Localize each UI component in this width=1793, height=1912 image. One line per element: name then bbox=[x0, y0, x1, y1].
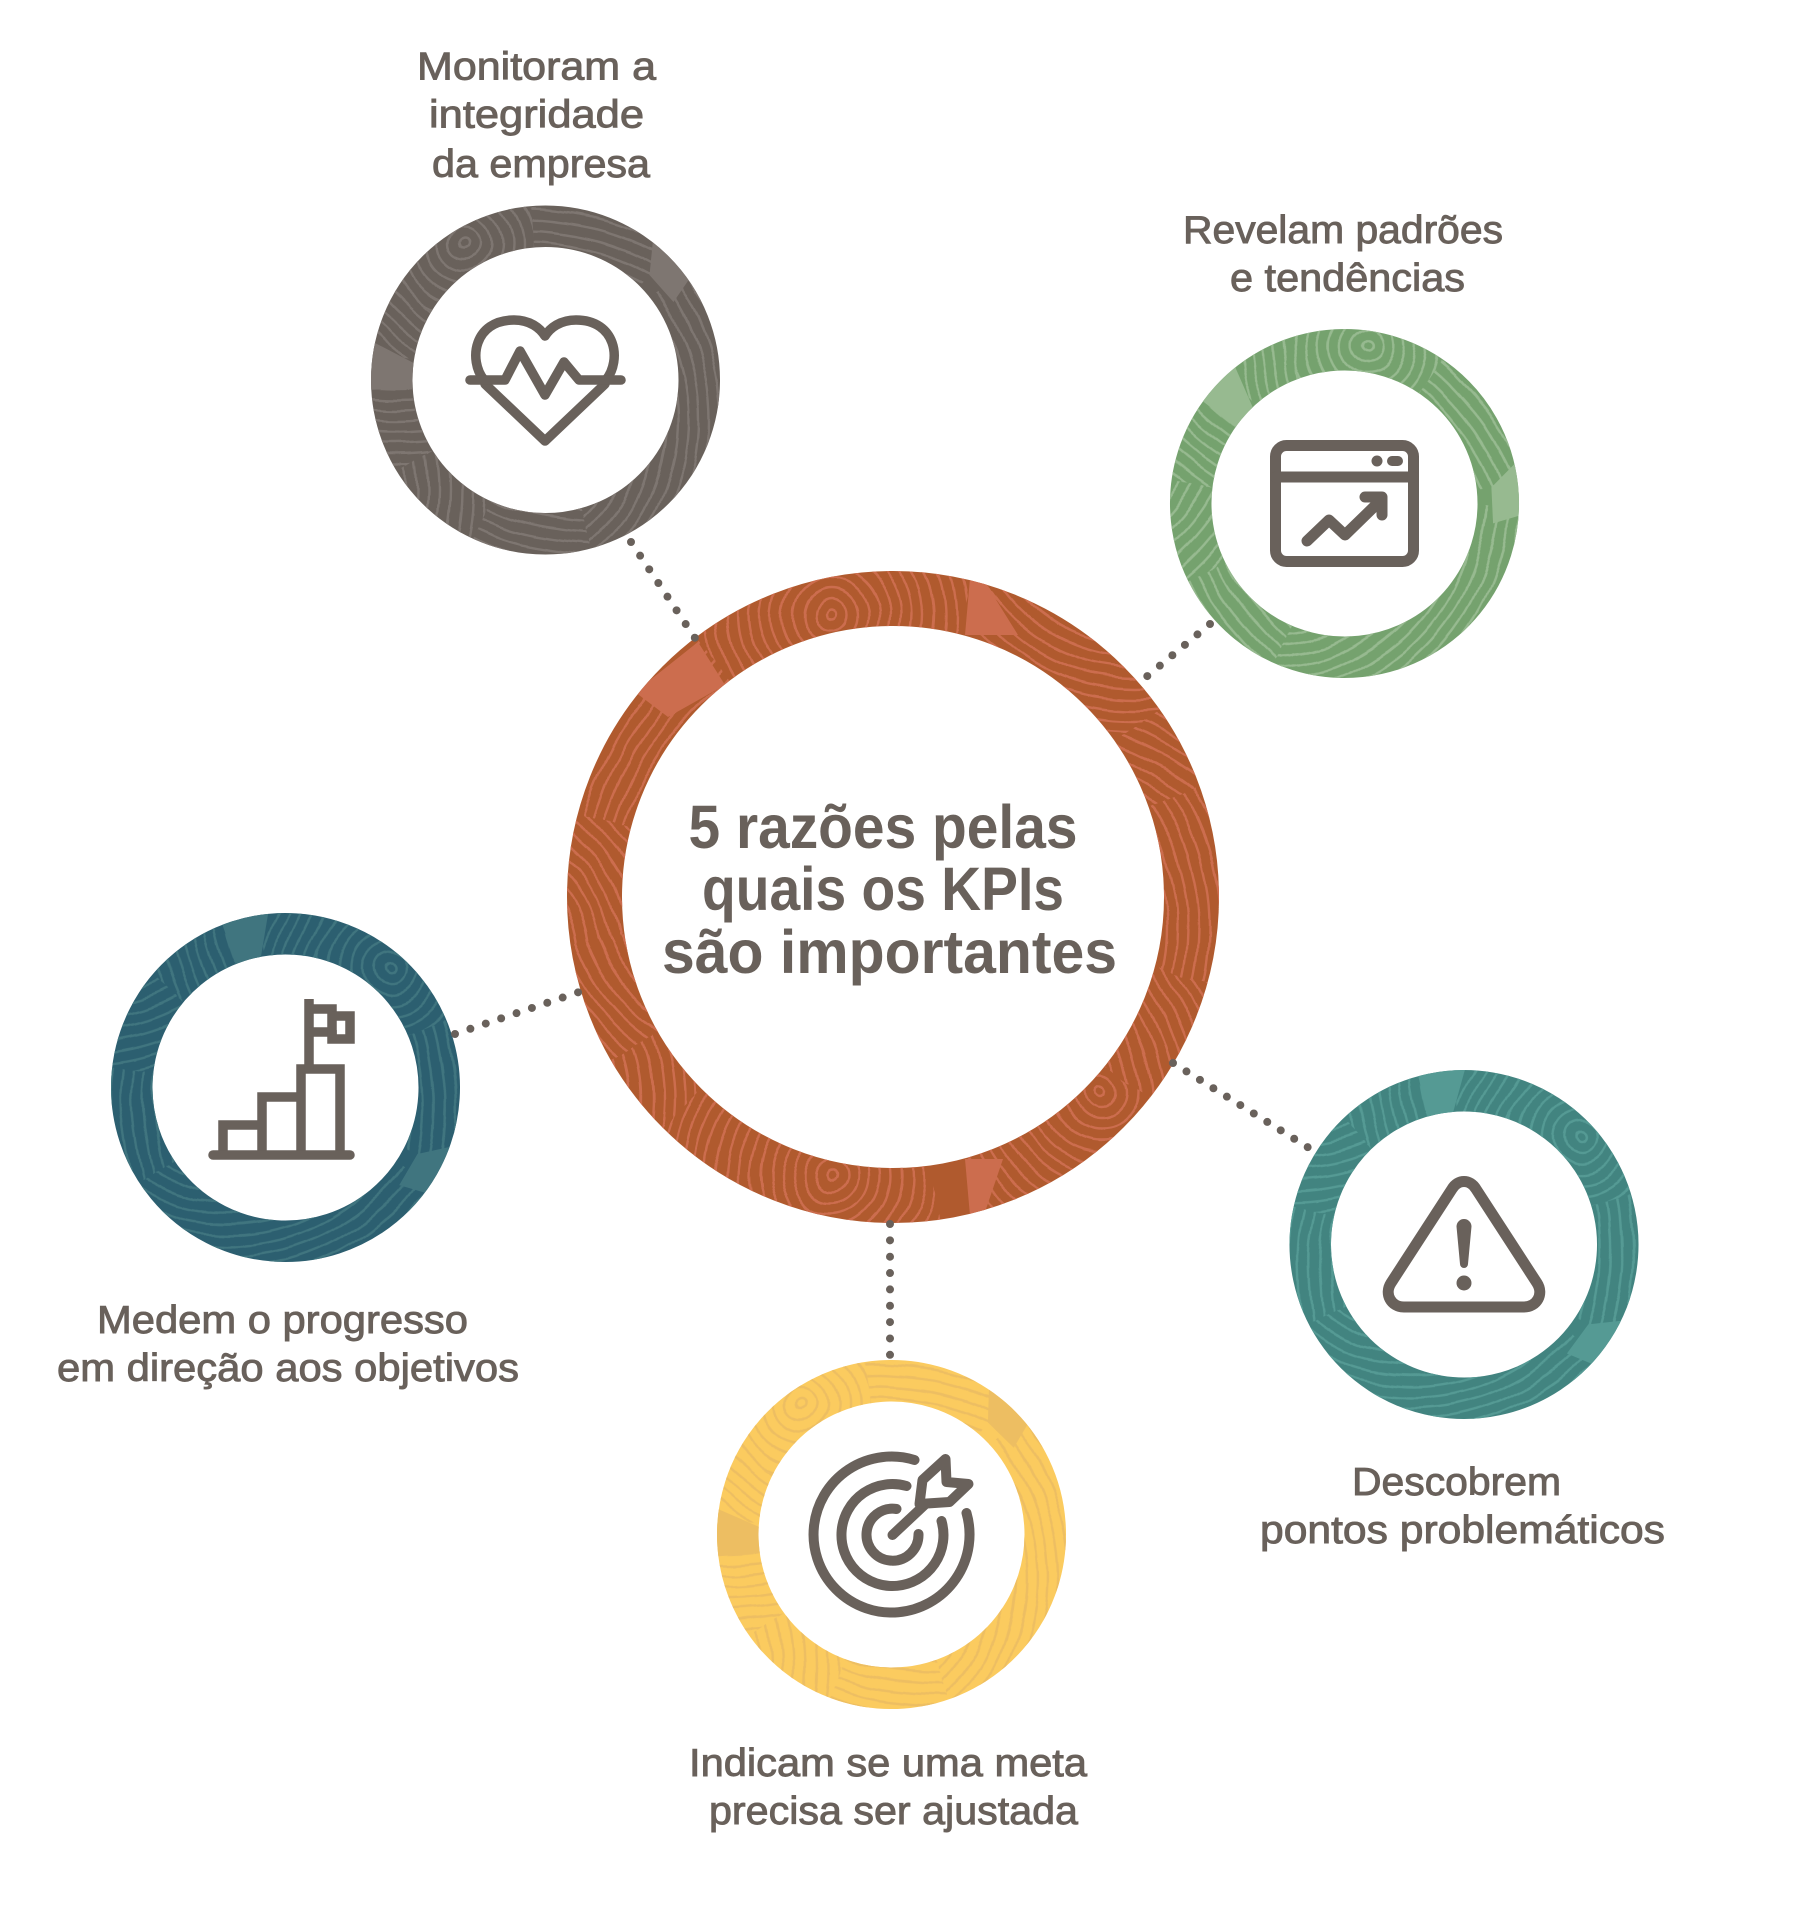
ring: goal bbox=[727, 1370, 1056, 1699]
label: goal: precisa ser ajustada bbox=[709, 1790, 1078, 1833]
title: são importantes bbox=[662, 918, 1117, 986]
dotted connector: health to centre bbox=[631, 542, 695, 638]
label: goal: Indicam se uma meta bbox=[689, 1742, 1087, 1785]
label: problem points bbox=[1260, 1461, 1665, 1552]
label: company health: Monitoram a bbox=[417, 46, 656, 88]
dotted connector: progress to centre bbox=[455, 992, 579, 1034]
label: progress: em direção aos objetivos bbox=[57, 1347, 519, 1390]
label: patterns and trends: e tendências bbox=[1230, 257, 1465, 300]
label: goal bbox=[689, 1742, 1087, 1833]
central ring bbox=[594, 598, 1192, 1196]
label: company health: integridade bbox=[429, 94, 644, 136]
label: company health bbox=[417, 46, 656, 186]
label: progress: Medem o progresso bbox=[97, 1299, 468, 1342]
icon: warning triangle bbox=[1388, 1182, 1540, 1307]
label: patterns and trends: Revelam padrões bbox=[1183, 209, 1503, 252]
label: problem points: pontos problemáticos bbox=[1260, 1509, 1665, 1552]
title bbox=[662, 793, 1117, 986]
dotted connector: problems to centre bbox=[1173, 1063, 1309, 1148]
icon: ascending bars with flag bbox=[213, 999, 350, 1155]
icon: target with arrow bbox=[814, 1457, 970, 1613]
ring: patterns and trends bbox=[1170, 329, 1519, 678]
dotted connector: trends to centre bbox=[1145, 624, 1210, 678]
ring: problem points bbox=[1282, 1062, 1646, 1427]
label: patterns and trends bbox=[1183, 209, 1503, 300]
icon: heart with pulse bbox=[470, 320, 621, 441]
title: quais os KPIs bbox=[702, 855, 1064, 923]
title: 5 razões pelas bbox=[688, 793, 1078, 861]
label: company health: da empresa bbox=[432, 143, 650, 186]
ring: progress bbox=[111, 913, 460, 1262]
label: progress bbox=[57, 1299, 519, 1390]
icon: browser window with rising chart bbox=[1276, 446, 1414, 562]
label: problem points: Descobrem bbox=[1352, 1461, 1561, 1504]
dotted connector: goal to centre bbox=[886, 1224, 894, 1356]
ring: company health bbox=[392, 226, 699, 534]
